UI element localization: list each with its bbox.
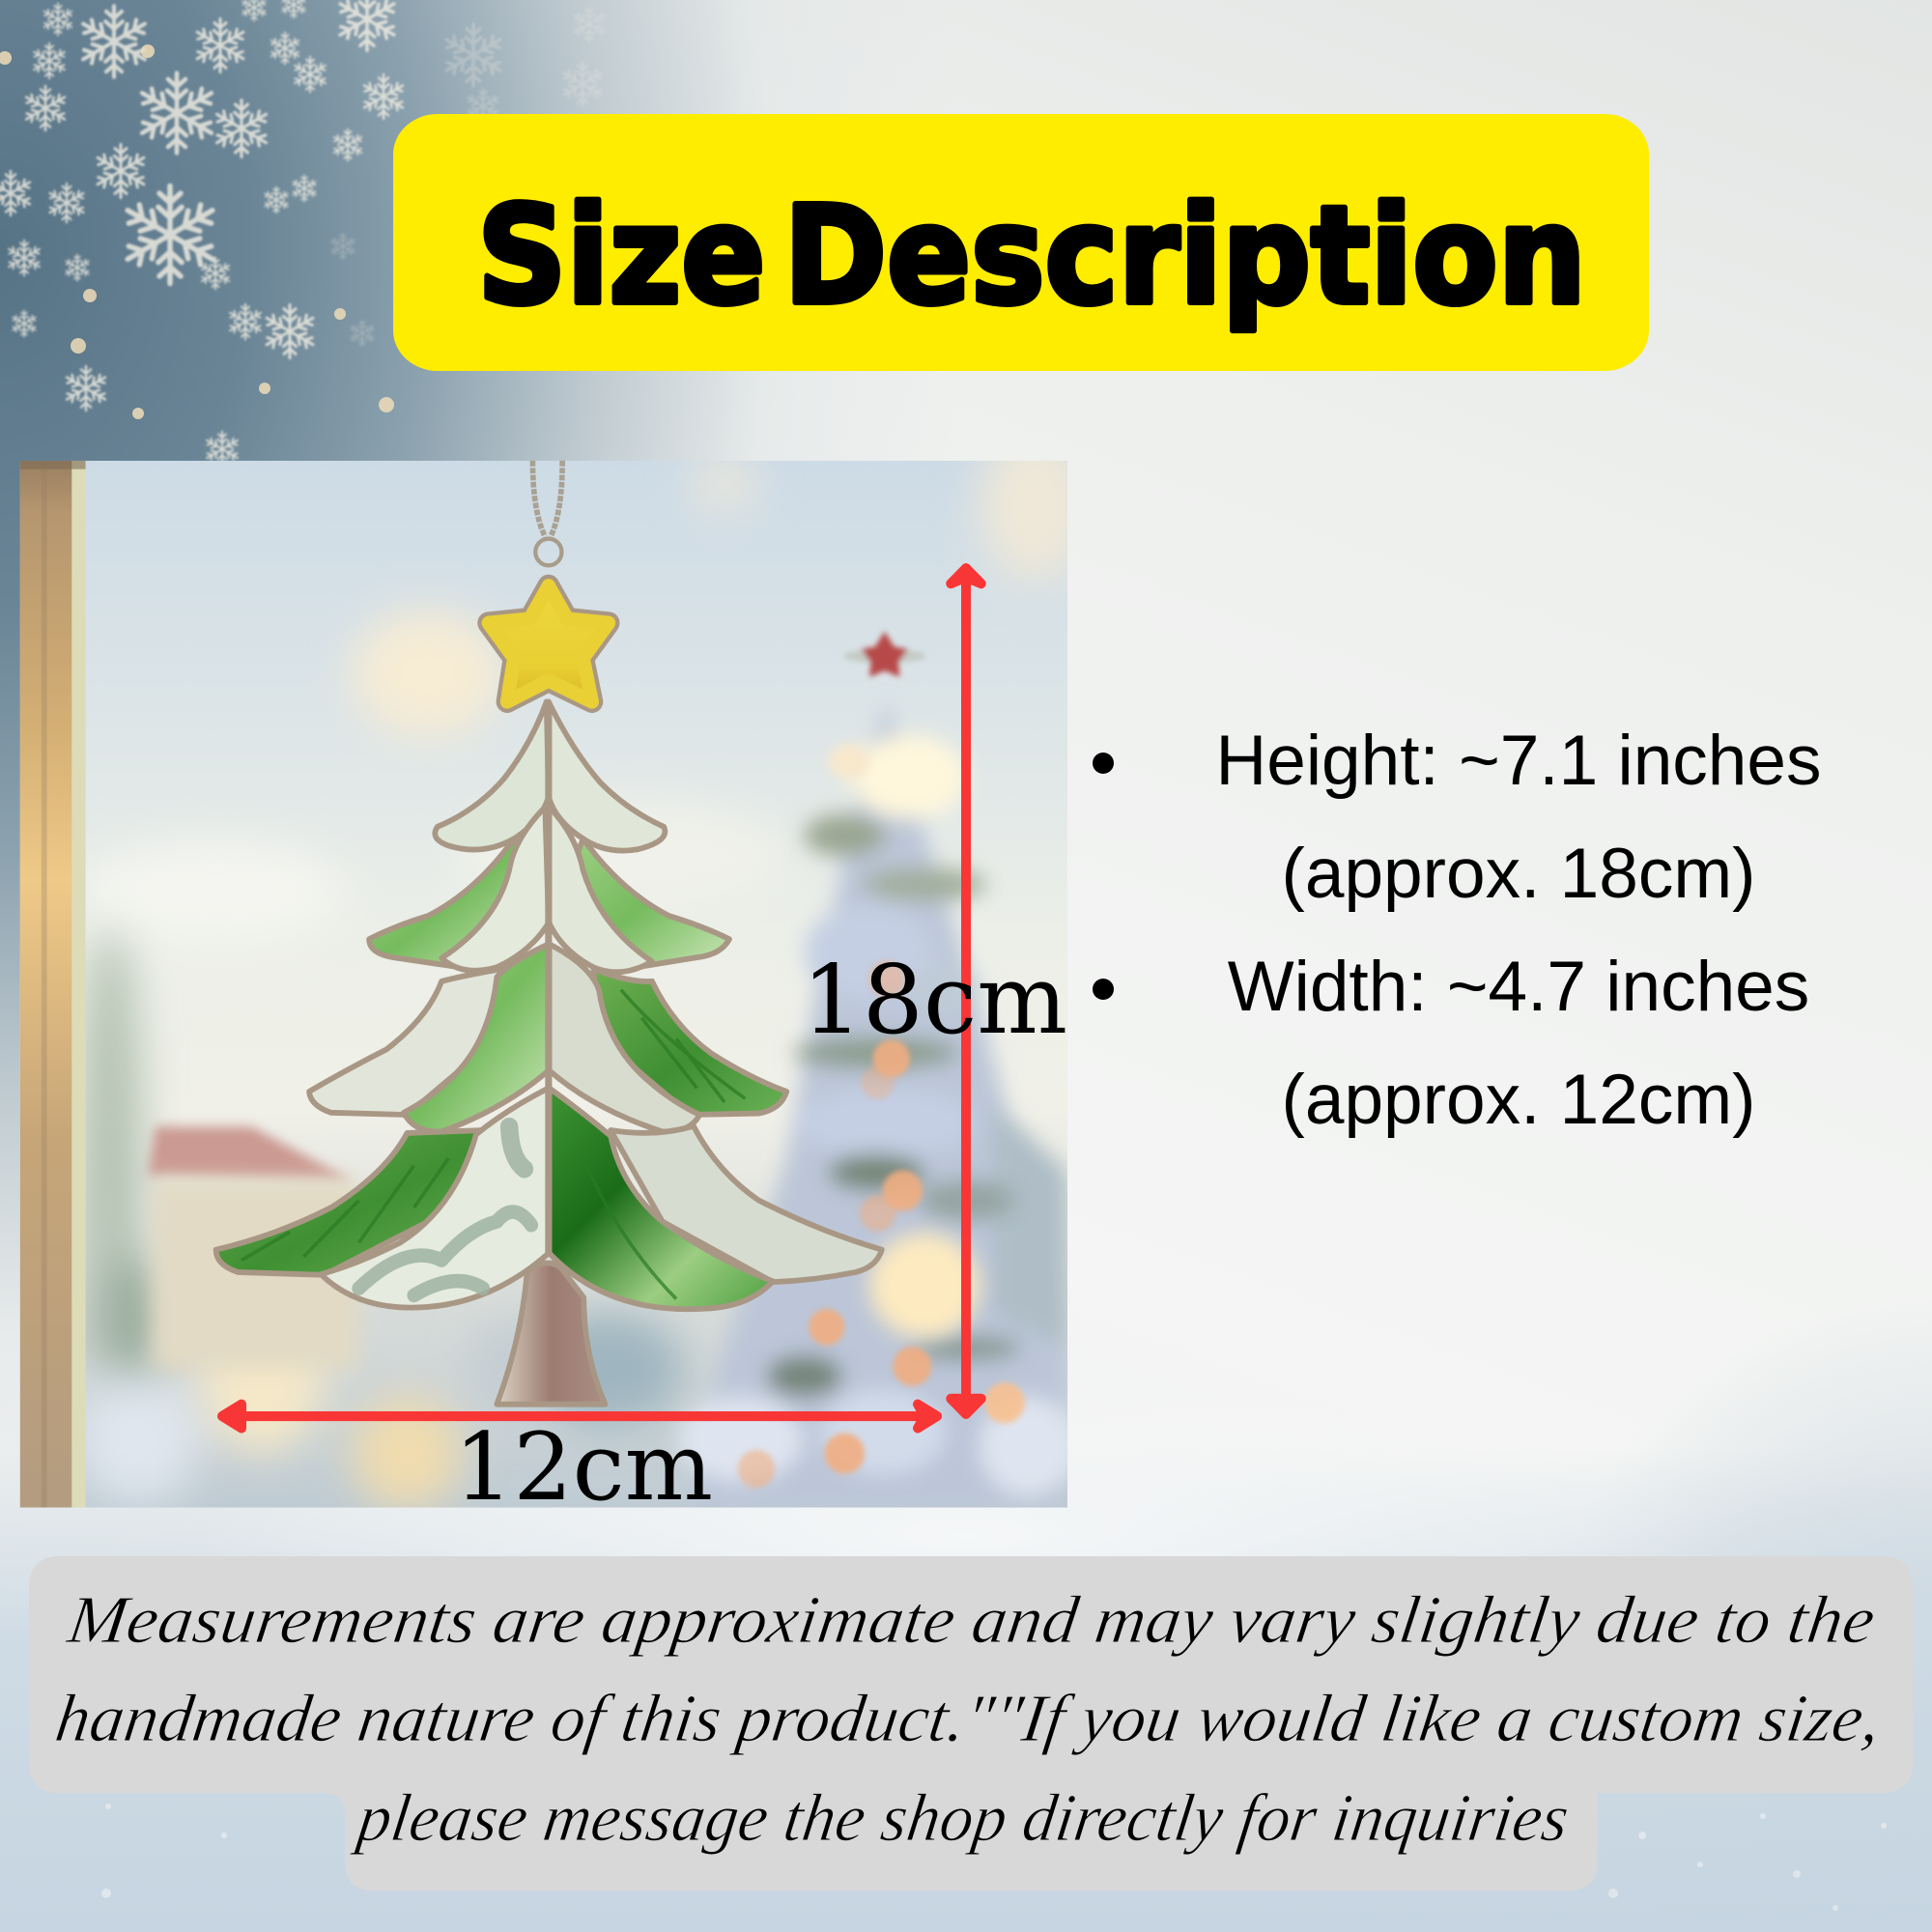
glass swirls xyxy=(358,1126,531,1295)
tier 4 outer glass xyxy=(216,1130,483,1275)
disclaimer background xyxy=(29,1556,1913,1890)
size list xyxy=(1093,722,1822,1139)
disclaimer line 1: Measurements are approximate and may vary slightly due to the xyxy=(63,1582,1880,1658)
star xyxy=(489,585,609,701)
bokeh lights xyxy=(738,961,1025,1488)
photo backdrop xyxy=(20,428,1091,1510)
disclaimer text xyxy=(51,1582,1886,1856)
height label: 18cm xyxy=(802,946,1067,1056)
banner background xyxy=(393,114,1649,371)
bullet: width xyxy=(1093,979,1114,1000)
width line 2: (approx. 12cm) xyxy=(1282,1061,1755,1139)
product photo panel xyxy=(20,428,1091,1510)
center lead line xyxy=(544,701,554,1257)
tier 3 outer glass xyxy=(309,969,503,1115)
title banner xyxy=(393,114,1649,371)
tier 4 inner glass xyxy=(321,1088,549,1308)
window frame xyxy=(20,461,86,1508)
blurred house xyxy=(149,1126,358,1369)
disclaimer line 3: please message the shop directly for inquiries xyxy=(349,1780,1574,1856)
tier 2 inner glass xyxy=(441,807,549,971)
tier 1 glass xyxy=(435,701,549,850)
disclaimer panel xyxy=(29,1556,1913,1890)
height arrow xyxy=(951,568,981,1414)
width label: 12cm xyxy=(454,1413,713,1521)
title text: Size Description xyxy=(477,178,1586,335)
blurred background tree xyxy=(678,701,1076,1508)
stained glass tree xyxy=(216,585,882,1405)
ornament ring xyxy=(535,539,561,565)
height line 2: (approx. 18cm) xyxy=(1282,835,1755,913)
width arrow xyxy=(222,1405,937,1428)
bullet: height xyxy=(1093,753,1114,774)
tier 2 outer glass xyxy=(369,838,531,969)
blurred red star xyxy=(843,632,926,677)
disclaimer line 2: handmade nature of this product.""If you would like a custom size, xyxy=(51,1681,1886,1756)
width line 1: Width: ~4.7 inches xyxy=(1228,948,1809,1026)
trunk xyxy=(497,1263,605,1405)
tier 3 inner glass xyxy=(404,944,549,1132)
ornament chain xyxy=(532,461,562,536)
height line 1: Height: ~7.1 inches xyxy=(1215,722,1822,800)
